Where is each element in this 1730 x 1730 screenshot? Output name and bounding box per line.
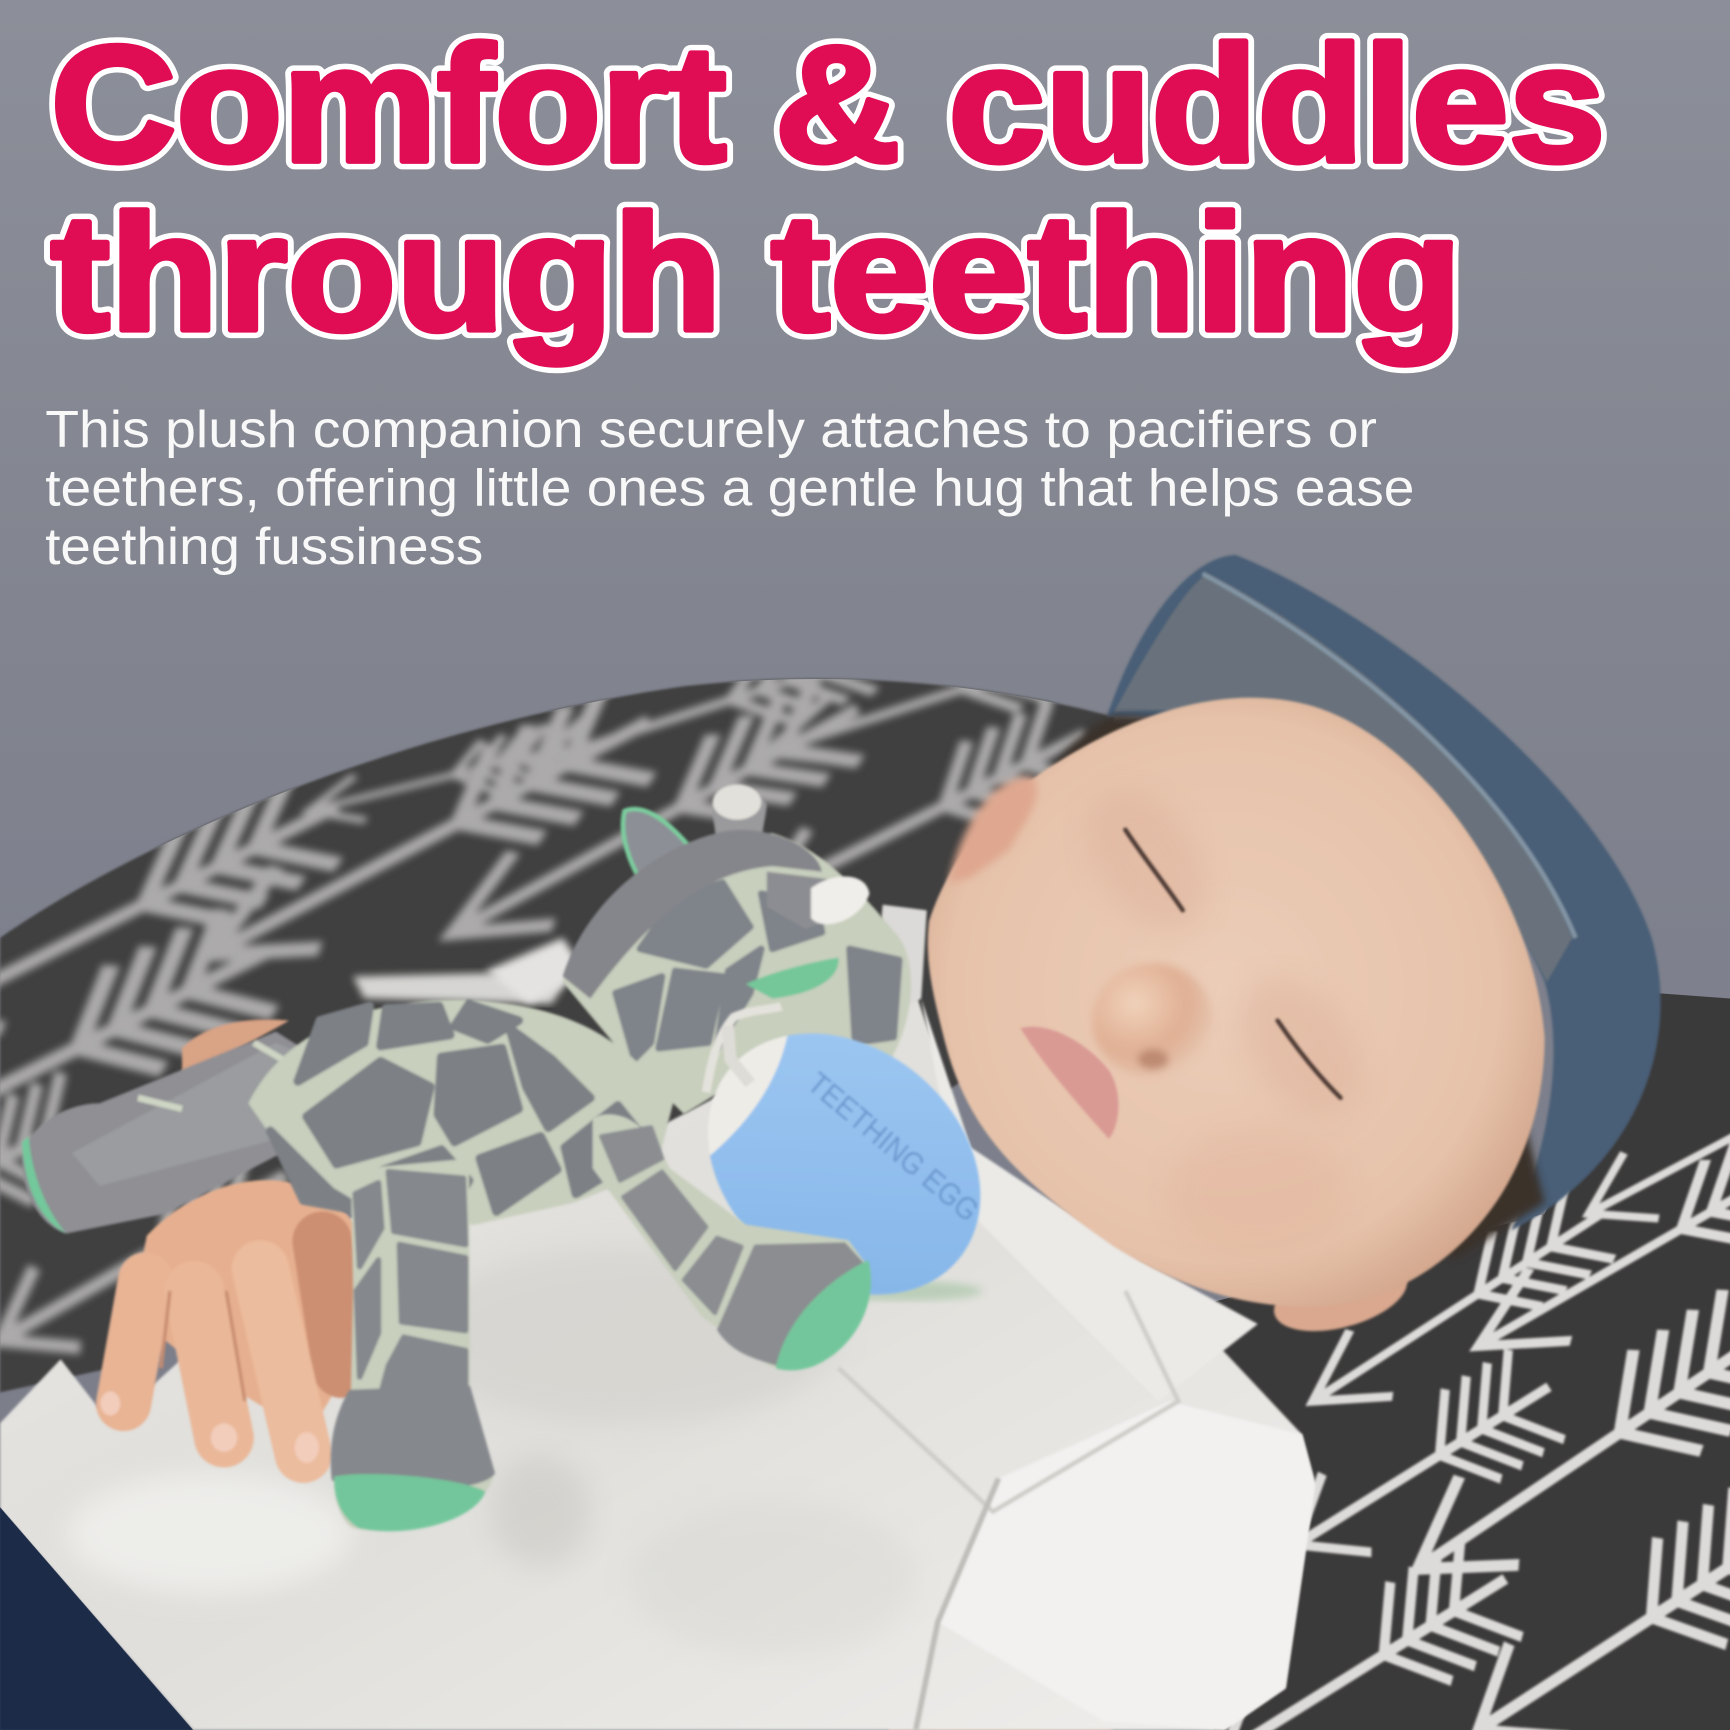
baby: closed eyes bbox=[1125, 830, 1341, 1098]
baby: hat bbox=[1107, 555, 1661, 1230]
baby: cheek blush bbox=[1170, 1125, 1346, 1258]
pillow: upper left patterned cushion bbox=[0, 605, 1125, 1392]
description text bbox=[45, 400, 1414, 575]
description text: teething fussiness bbox=[45, 517, 483, 575]
title line 2: through teething bbox=[51, 181, 1462, 366]
baby: nose bbox=[1092, 963, 1214, 1078]
giraffe: horn bbox=[712, 790, 767, 847]
egg: white cap bbox=[706, 1034, 788, 1156]
title bbox=[51, 12, 1605, 366]
baby: hand bbox=[100, 1020, 355, 1463]
giraffe: mane bbox=[563, 830, 822, 999]
baby: jeans bbox=[0, 1507, 193, 1730]
pillow: lower right patterned cushion bbox=[1194, 993, 1730, 1730]
giraffe: far ear bbox=[623, 809, 701, 894]
baby: ear lower bbox=[1266, 1249, 1415, 1344]
giraffe: near ear bbox=[767, 872, 855, 929]
giraffe: back leg bbox=[22, 1032, 320, 1234]
giraffe: body bbox=[248, 1000, 673, 1225]
egg: shadow bbox=[827, 1281, 982, 1301]
title line 1: Comfort & cuddles bbox=[51, 12, 1605, 197]
egg: blue body bbox=[655, 980, 1033, 1348]
title line 2: through teething bbox=[51, 181, 1462, 366]
baby: white shirt bbox=[0, 905, 1315, 1730]
baby: eyelid shade bbox=[1062, 769, 1387, 1140]
photo: sleeping baby with plush giraffe bbox=[0, 555, 1730, 1730]
giraffe: snout bbox=[746, 958, 839, 999]
egg: cord bbox=[706, 1006, 781, 1092]
baby: lips bbox=[1021, 1027, 1118, 1139]
baby: face bbox=[928, 698, 1545, 1306]
description text: teethers, offering little ones a gentle hug that helps ease bbox=[45, 458, 1414, 516]
plush giraffe bbox=[22, 784, 911, 1531]
teething egg bbox=[702, 1002, 982, 1303]
baby: shoulder arm bbox=[888, 1644, 1114, 1730]
baby: ear bbox=[949, 777, 1037, 883]
giraffe: rear leg bbox=[592, 1114, 871, 1370]
title line 1: Comfort & cuddles bbox=[51, 12, 1605, 197]
egg: embossed label: TEETHING EGG bbox=[801, 1065, 986, 1228]
description text: This plush companion securely attaches to pacifiers or bbox=[45, 400, 1377, 458]
giraffe: front leg bbox=[333, 1158, 494, 1531]
baby: hair bbox=[1043, 715, 1545, 1258]
giraffe: head and neck bbox=[563, 833, 911, 1114]
